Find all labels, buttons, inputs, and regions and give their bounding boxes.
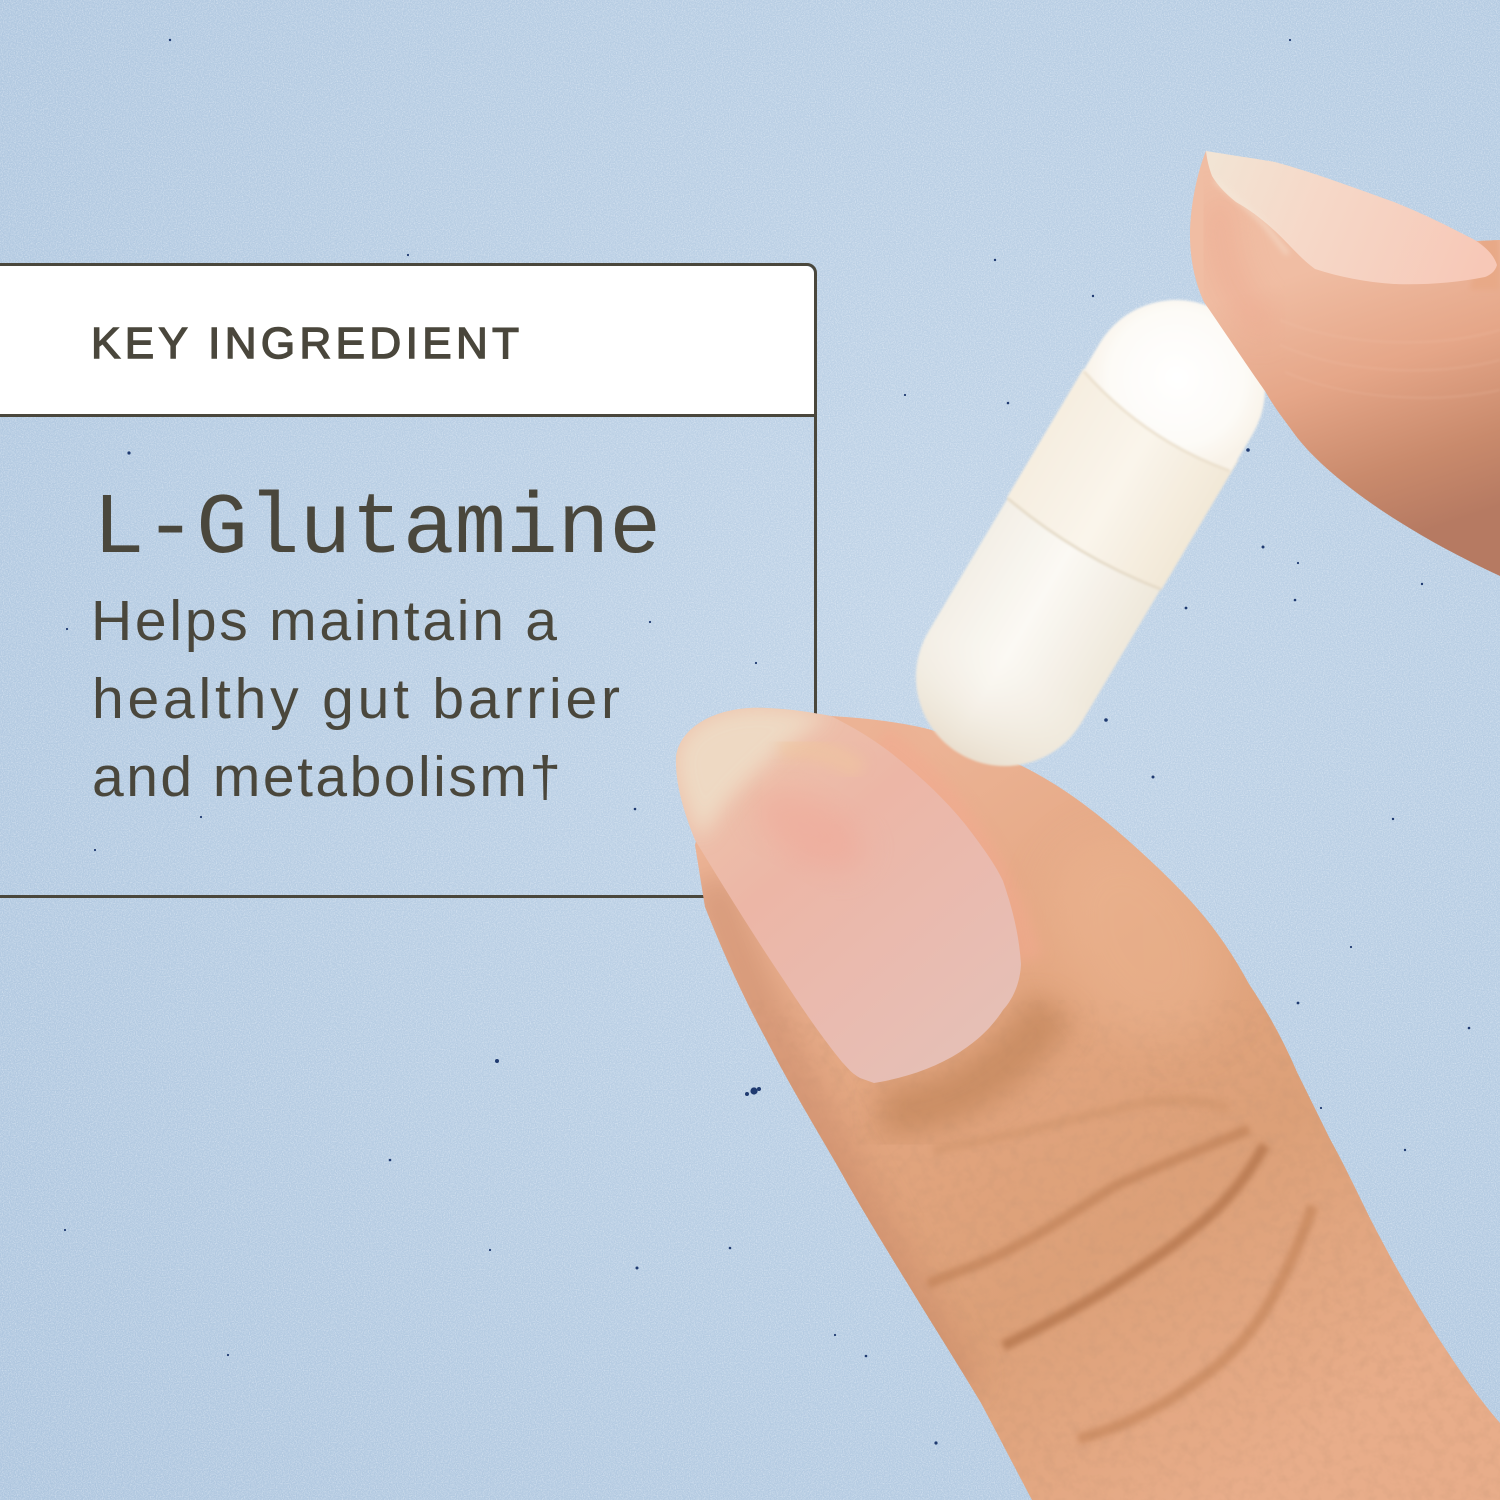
capsule lower body bbox=[883, 498, 1161, 799]
light fingertip area bbox=[1086, 884, 1208, 1024]
text block: description: Helps maintain a bbox=[91, 589, 557, 653]
creases bbox=[928, 1100, 1313, 1439]
heading: key ingredient: KEY INGREDIENT bbox=[91, 319, 519, 368]
capsule top dome bbox=[1074, 267, 1298, 477]
capsule band bbox=[1003, 369, 1238, 596]
text block: description bbox=[91, 589, 620, 809]
panel: key ingredient card bbox=[0, 263, 817, 898]
text block: description: and metabolism† bbox=[92, 745, 561, 809]
icon: thumb bbox=[676, 708, 1500, 1500]
shadow below cuticle bbox=[880, 1005, 1052, 1112]
photo: fingers holding capsule bbox=[676, 151, 1500, 1500]
icon: upper finger bbox=[1190, 151, 1500, 576]
dark left edge bbox=[710, 880, 960, 1390]
pink nail fold bbox=[880, 740, 1030, 960]
title: L-Glutamine: L-Glutamine bbox=[93, 480, 661, 578]
card header band bbox=[0, 266, 814, 417]
icon: white capsule bbox=[882, 266, 1299, 799]
text block: description: healthy gut barrier bbox=[92, 667, 620, 731]
thumbnail bbox=[676, 708, 1021, 1083]
